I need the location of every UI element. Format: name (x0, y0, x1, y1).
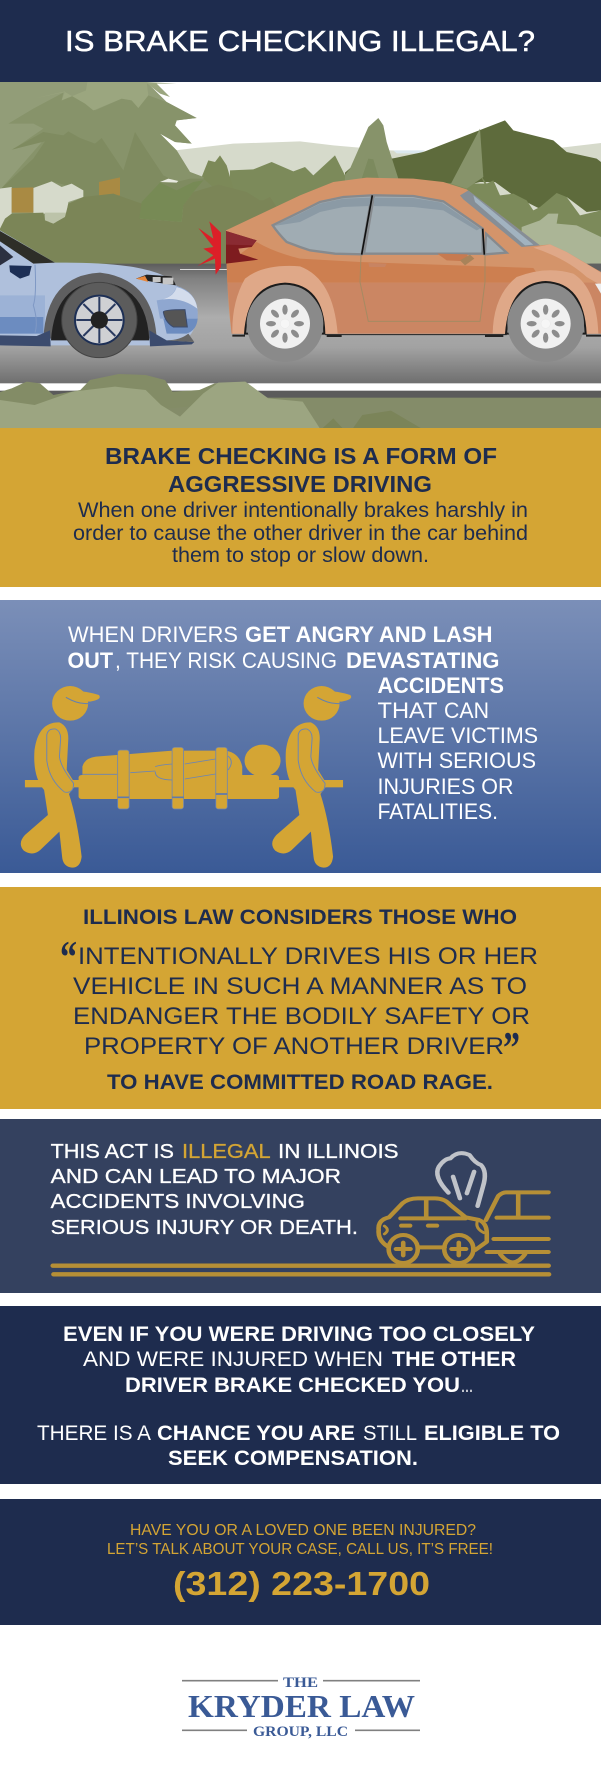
panel text: SERIOUS INJURY OR DEATH. (51, 1216, 358, 1239)
quotation text: INTENTIONALLY DRIVES HIS OR HER (78, 943, 538, 970)
air intake (163, 310, 187, 327)
call to action text: HAVE YOU OR A LOVED ONE BEEN INJURED? (130, 1522, 476, 1539)
road (0, 264, 601, 384)
car windows (273, 195, 507, 254)
front carrier (272, 686, 351, 868)
foreground grass and bushes (0, 374, 601, 429)
closing statement: TO HAVE COMMITTED ROAD RAGE. (107, 1071, 493, 1094)
panel text (51, 1140, 399, 1239)
car door outline (360, 255, 485, 321)
tree trunks (12, 177, 120, 213)
panel text (37, 1323, 560, 1470)
panel text: ACCIDENTS INVOLVING (51, 1190, 305, 1213)
panel text: STILL (363, 1422, 417, 1445)
panel: call to action (0, 1499, 601, 1625)
call to action text: LET’S TALK ABOUT YOUR CASE, CALL US, IT’S FREE! (107, 1541, 493, 1558)
wheels (247, 285, 323, 362)
panel: act is illegal (0, 1119, 601, 1293)
panel heading: BRAKE CHECKING IS A FORM OF (105, 443, 497, 469)
panel text: ... (461, 1374, 473, 1397)
title text: IS BRAKE CHECKING ILLEGAL? (65, 26, 535, 58)
panel body text: When one driver intentionally brakes harshly in (78, 499, 528, 522)
blue car (0, 230, 198, 358)
large tree (0, 82, 227, 229)
phone number: (312) 223-1700 (173, 1565, 430, 1602)
logo: The Kryder Law Group, LLC: GROUP, LLC (253, 1724, 348, 1740)
panel text: CHANCE YOU ARE (157, 1422, 355, 1445)
panel text: ELIGIBLE TO (424, 1422, 560, 1445)
panel text: WITH SERIOUS (378, 748, 536, 773)
panel text: , THEY RISK CAUSING (115, 648, 337, 673)
pale green shrub (522, 214, 601, 269)
panel heading: ILLINOIS LAW CONSIDERS THOSE WHO (83, 906, 517, 929)
panel text: OUT (68, 648, 114, 673)
panel text: AND CAN LEAD TO MAJOR (51, 1165, 341, 1188)
panel: aggressive driving definition (0, 428, 601, 587)
smoke (437, 1153, 485, 1206)
car sill line (325, 333, 507, 336)
second vehicle (486, 1192, 548, 1262)
headlight (136, 275, 176, 285)
damaged car (379, 1198, 487, 1263)
distant hills (0, 141, 601, 282)
panel text: ACCIDENTS (378, 673, 504, 698)
panel body text (73, 499, 528, 567)
panel heading (105, 443, 497, 497)
icon: two people carrying a stretcher (21, 686, 351, 868)
panel text: THIS ACT IS (51, 1140, 174, 1163)
logo: The Kryder Law Group, LLC: THE (283, 1675, 318, 1691)
panel text: THE OTHER (392, 1348, 516, 1371)
panel text: WHEN DRIVERS (68, 622, 238, 647)
icon: car crash on a road (53, 1153, 549, 1274)
panel: Illinois law quote (0, 887, 601, 1109)
panel text: EVEN IF YOU WERE DRIVING TOO CLOSELY (63, 1323, 535, 1346)
panel body text: order to cause the other driver in the car behind (73, 522, 528, 545)
panel text: FATALITIES. (378, 799, 498, 824)
side mirror (437, 254, 468, 261)
logo: The Kryder Law Group, LLC: KRYDER LAW (188, 1688, 415, 1724)
panel text: THERE IS A (37, 1422, 151, 1445)
panel text: INJURIES OR (378, 774, 514, 799)
quotation text: ” (503, 1022, 520, 1073)
orange car (226, 178, 601, 362)
title banner (0, 0, 601, 82)
panel text (68, 622, 538, 824)
panel text: DEVASTATING (346, 648, 500, 673)
quotation text: VEHICLE IN SUCH A MANNER AS TO (73, 973, 527, 1000)
front wheel arch (43, 273, 157, 339)
panel text: DRIVER BRAKE CHECKED YOU (125, 1374, 460, 1397)
panel text: AND WERE INJURED WHEN (83, 1348, 383, 1371)
stretcher pole (25, 780, 343, 787)
panel text: SEEK COMPENSATION. (168, 1447, 418, 1470)
quotation text: ENDANGER THE BODILY SAFETY OR (73, 1003, 530, 1030)
green hills (230, 155, 601, 282)
dark green mountain (345, 120, 601, 215)
panel body text: them to stop or slow down. (172, 544, 429, 567)
conifers on the horizon (200, 118, 483, 192)
wheel arches (232, 266, 598, 334)
panel: devastating accidents (0, 600, 601, 873)
quotation text (60, 931, 538, 1073)
call to action text (107, 1522, 493, 1558)
panel heading: AGGRESSIVE DRIVING (168, 471, 432, 497)
side mirror (9, 265, 32, 279)
road lines (53, 1266, 549, 1274)
panel text: IN ILLINOIS (278, 1140, 399, 1163)
patient on stretcher (79, 745, 281, 809)
front wheel (62, 282, 137, 358)
tail light (226, 231, 258, 264)
quotation text: “ (60, 931, 77, 982)
red impact burst (197, 221, 221, 275)
logo: The Kryder Law Group, LLC (182, 1675, 420, 1740)
roadside bushes (0, 185, 277, 265)
hero illustration: brake checking on a road (0, 82, 601, 429)
windshield (460, 190, 540, 247)
panel text: LEAVE VICTIMS (378, 723, 538, 748)
panel text: THAT (378, 698, 438, 723)
quotation text: PROPERTY OF ANOTHER DRIVER (84, 1033, 504, 1060)
panel: still eligible for compensation (0, 1306, 601, 1484)
road edge stripe (0, 383, 601, 391)
rear carrier (21, 686, 100, 868)
panel text: CAN (444, 698, 489, 723)
panel text: GET ANGRY AND LASH (245, 622, 492, 647)
side skirts (0, 330, 194, 346)
panel text: ILLEGAL (182, 1140, 271, 1163)
